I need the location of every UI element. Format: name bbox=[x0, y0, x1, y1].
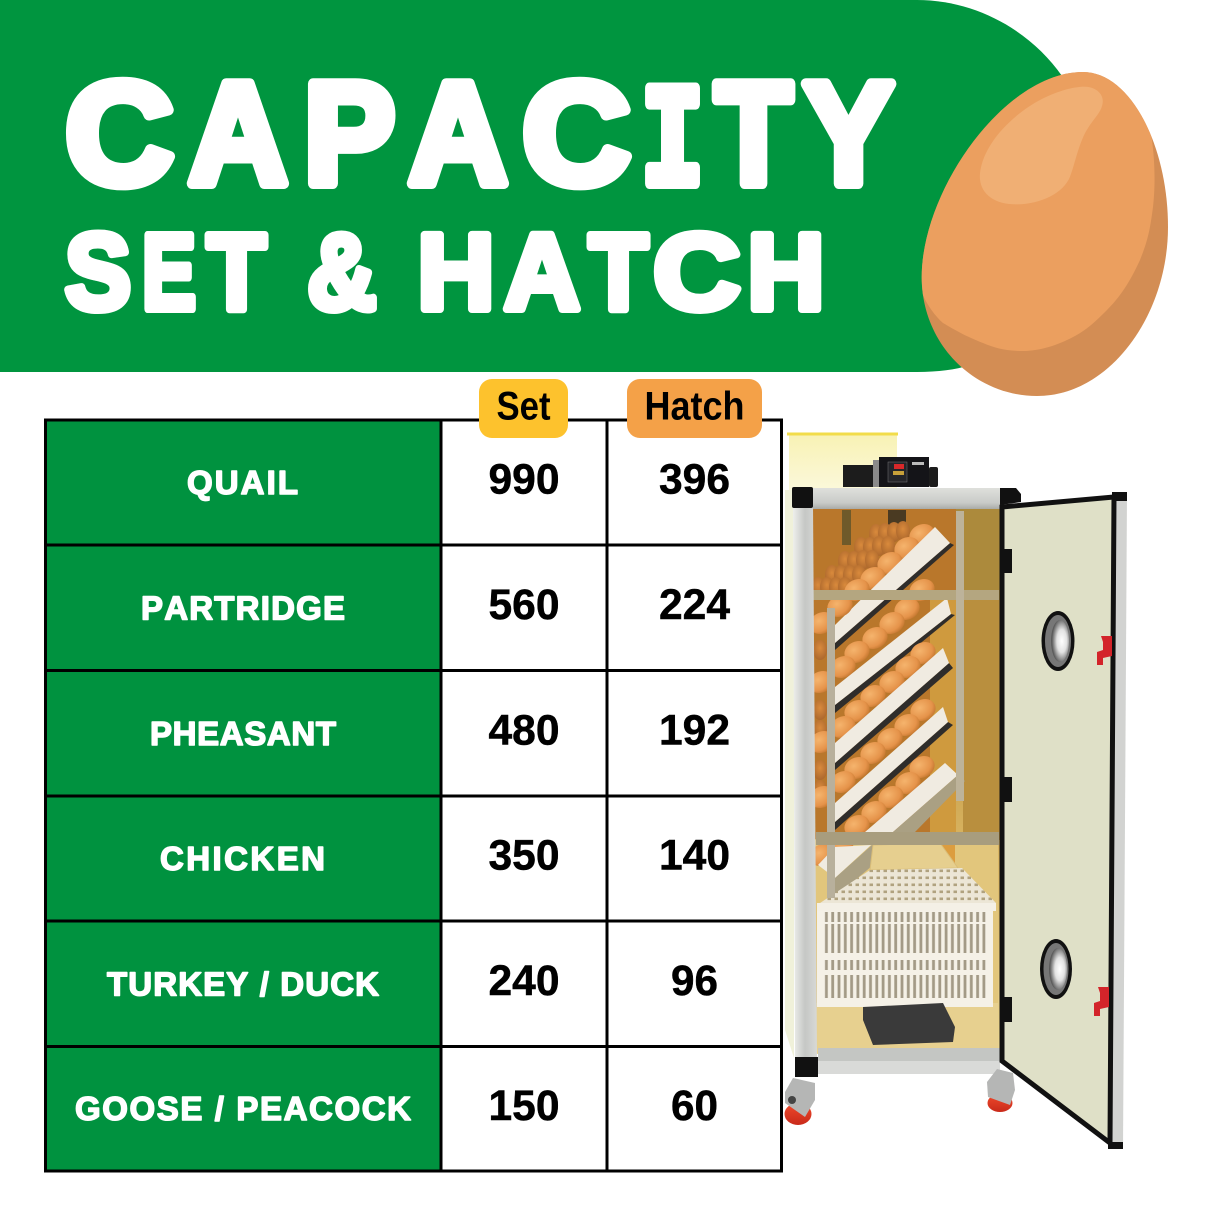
incubator photo illustration bbox=[784, 432, 1127, 1149]
title: capacity: A bbox=[408, 52, 508, 214]
control unit bbox=[843, 457, 938, 487]
lower door latch bbox=[1094, 987, 1109, 1016]
title: capacity: Y bbox=[804, 52, 894, 214]
water tray bbox=[863, 1003, 955, 1045]
row: pheasant: 192 bbox=[659, 706, 730, 754]
open door bbox=[1002, 492, 1127, 1149]
rear hatching basket bbox=[870, 843, 958, 870]
eggs: fourth tray bbox=[806, 695, 939, 797]
lower porthole bbox=[1040, 939, 1072, 999]
lower hatching basket bbox=[817, 955, 993, 1007]
row: goose and peacock: 150 bbox=[488, 1082, 560, 1130]
eggs: fifth tray bbox=[806, 752, 938, 870]
title: capacity: I bbox=[641, 62, 704, 228]
subtitle: set and hatch: S bbox=[65, 212, 131, 332]
row: goose and peacock: 60 bbox=[671, 1082, 718, 1130]
subtitle: set and hatch: H bbox=[418, 212, 494, 332]
row: chicken: CHICKEN bbox=[160, 840, 325, 877]
cabinet interior bbox=[813, 509, 1000, 1054]
row: quail: 396 bbox=[659, 456, 730, 504]
row: turkey and duck: TURKEY / DUCK bbox=[107, 966, 379, 1002]
egg tray 3 bbox=[835, 648, 953, 770]
column tag: hatch bbox=[627, 379, 762, 438]
eggs: top tray bbox=[841, 520, 938, 605]
row: partridge bbox=[141, 581, 730, 629]
subtitle: set and hatch: T bbox=[589, 212, 648, 332]
table grid bbox=[45, 420, 782, 1171]
row: turkey and duck: 96 bbox=[671, 957, 718, 1005]
egg tray 5 bbox=[818, 763, 965, 897]
column tag: set: Set bbox=[496, 384, 550, 428]
title: capacity: T bbox=[715, 52, 792, 214]
eggs: third tray bbox=[805, 638, 939, 742]
subtitle: set and hatch: C bbox=[653, 212, 740, 332]
subtitle: set and hatch bbox=[65, 212, 824, 332]
title: capacity: C bbox=[66, 52, 174, 214]
egg tray 2 bbox=[835, 598, 955, 713]
left caster bbox=[784, 1078, 815, 1125]
title: capacity: P bbox=[304, 52, 395, 214]
row: pheasant bbox=[150, 706, 730, 754]
door corner caps bbox=[1112, 492, 1127, 501]
row: partridge: 224 bbox=[659, 581, 730, 629]
row: goose and peacock bbox=[75, 1082, 718, 1130]
door hinges bbox=[1002, 549, 1012, 1022]
egg tray 4 bbox=[835, 707, 953, 830]
row: chicken: 350 bbox=[488, 832, 560, 880]
door outer strip bbox=[1108, 493, 1127, 1149]
row: turkey and duck bbox=[107, 957, 718, 1005]
subtitle: set and hatch: T bbox=[207, 212, 266, 332]
row: quail: QUAIL bbox=[187, 464, 298, 501]
back rows of eggs bbox=[811, 521, 910, 800]
capacity table bbox=[45, 420, 782, 1171]
upper hatching basket bbox=[817, 868, 996, 957]
row: chicken bbox=[160, 832, 730, 880]
subtitle: set and hatch: A bbox=[504, 212, 580, 332]
row: quail: 990 bbox=[488, 456, 560, 504]
subtitle: set and hatch: E bbox=[142, 212, 196, 332]
cabinet side wall bbox=[785, 490, 794, 1058]
door panel bbox=[1002, 497, 1114, 1143]
right caster bbox=[987, 1069, 1015, 1112]
icon: egg bbox=[922, 72, 1168, 396]
column tag: set bbox=[479, 379, 568, 438]
title: capacity: C bbox=[522, 52, 630, 214]
water tank bbox=[787, 432, 898, 490]
subtitle: set and hatch: & bbox=[307, 212, 376, 332]
row: partridge: 560 bbox=[488, 581, 560, 629]
subtitle: set and hatch: H bbox=[748, 212, 824, 332]
row: chicken: 140 bbox=[659, 832, 730, 880]
cabinet front frame bbox=[792, 487, 1021, 1077]
upper porthole bbox=[1042, 611, 1074, 671]
row: goose and peacock: GOOSE / PEACOCK bbox=[75, 1090, 411, 1127]
row: turkey and duck: 240 bbox=[488, 957, 560, 1005]
shelf bars bbox=[813, 511, 999, 898]
header banner bbox=[0, 0, 1062, 372]
title: capacity bbox=[66, 52, 894, 228]
column tag: hatch: Hatch bbox=[644, 384, 744, 428]
row: pheasant: 480 bbox=[488, 706, 560, 754]
row: pheasant: PHEASANT bbox=[150, 715, 336, 752]
row: partridge: PARTRIDGE bbox=[141, 590, 345, 626]
row: quail bbox=[187, 456, 730, 504]
upper door latch bbox=[1097, 636, 1112, 665]
title: capacity: A bbox=[188, 52, 288, 214]
eggs: second tray bbox=[806, 575, 938, 682]
egg tray 1 bbox=[835, 527, 954, 650]
species column background bbox=[45, 420, 441, 1171]
